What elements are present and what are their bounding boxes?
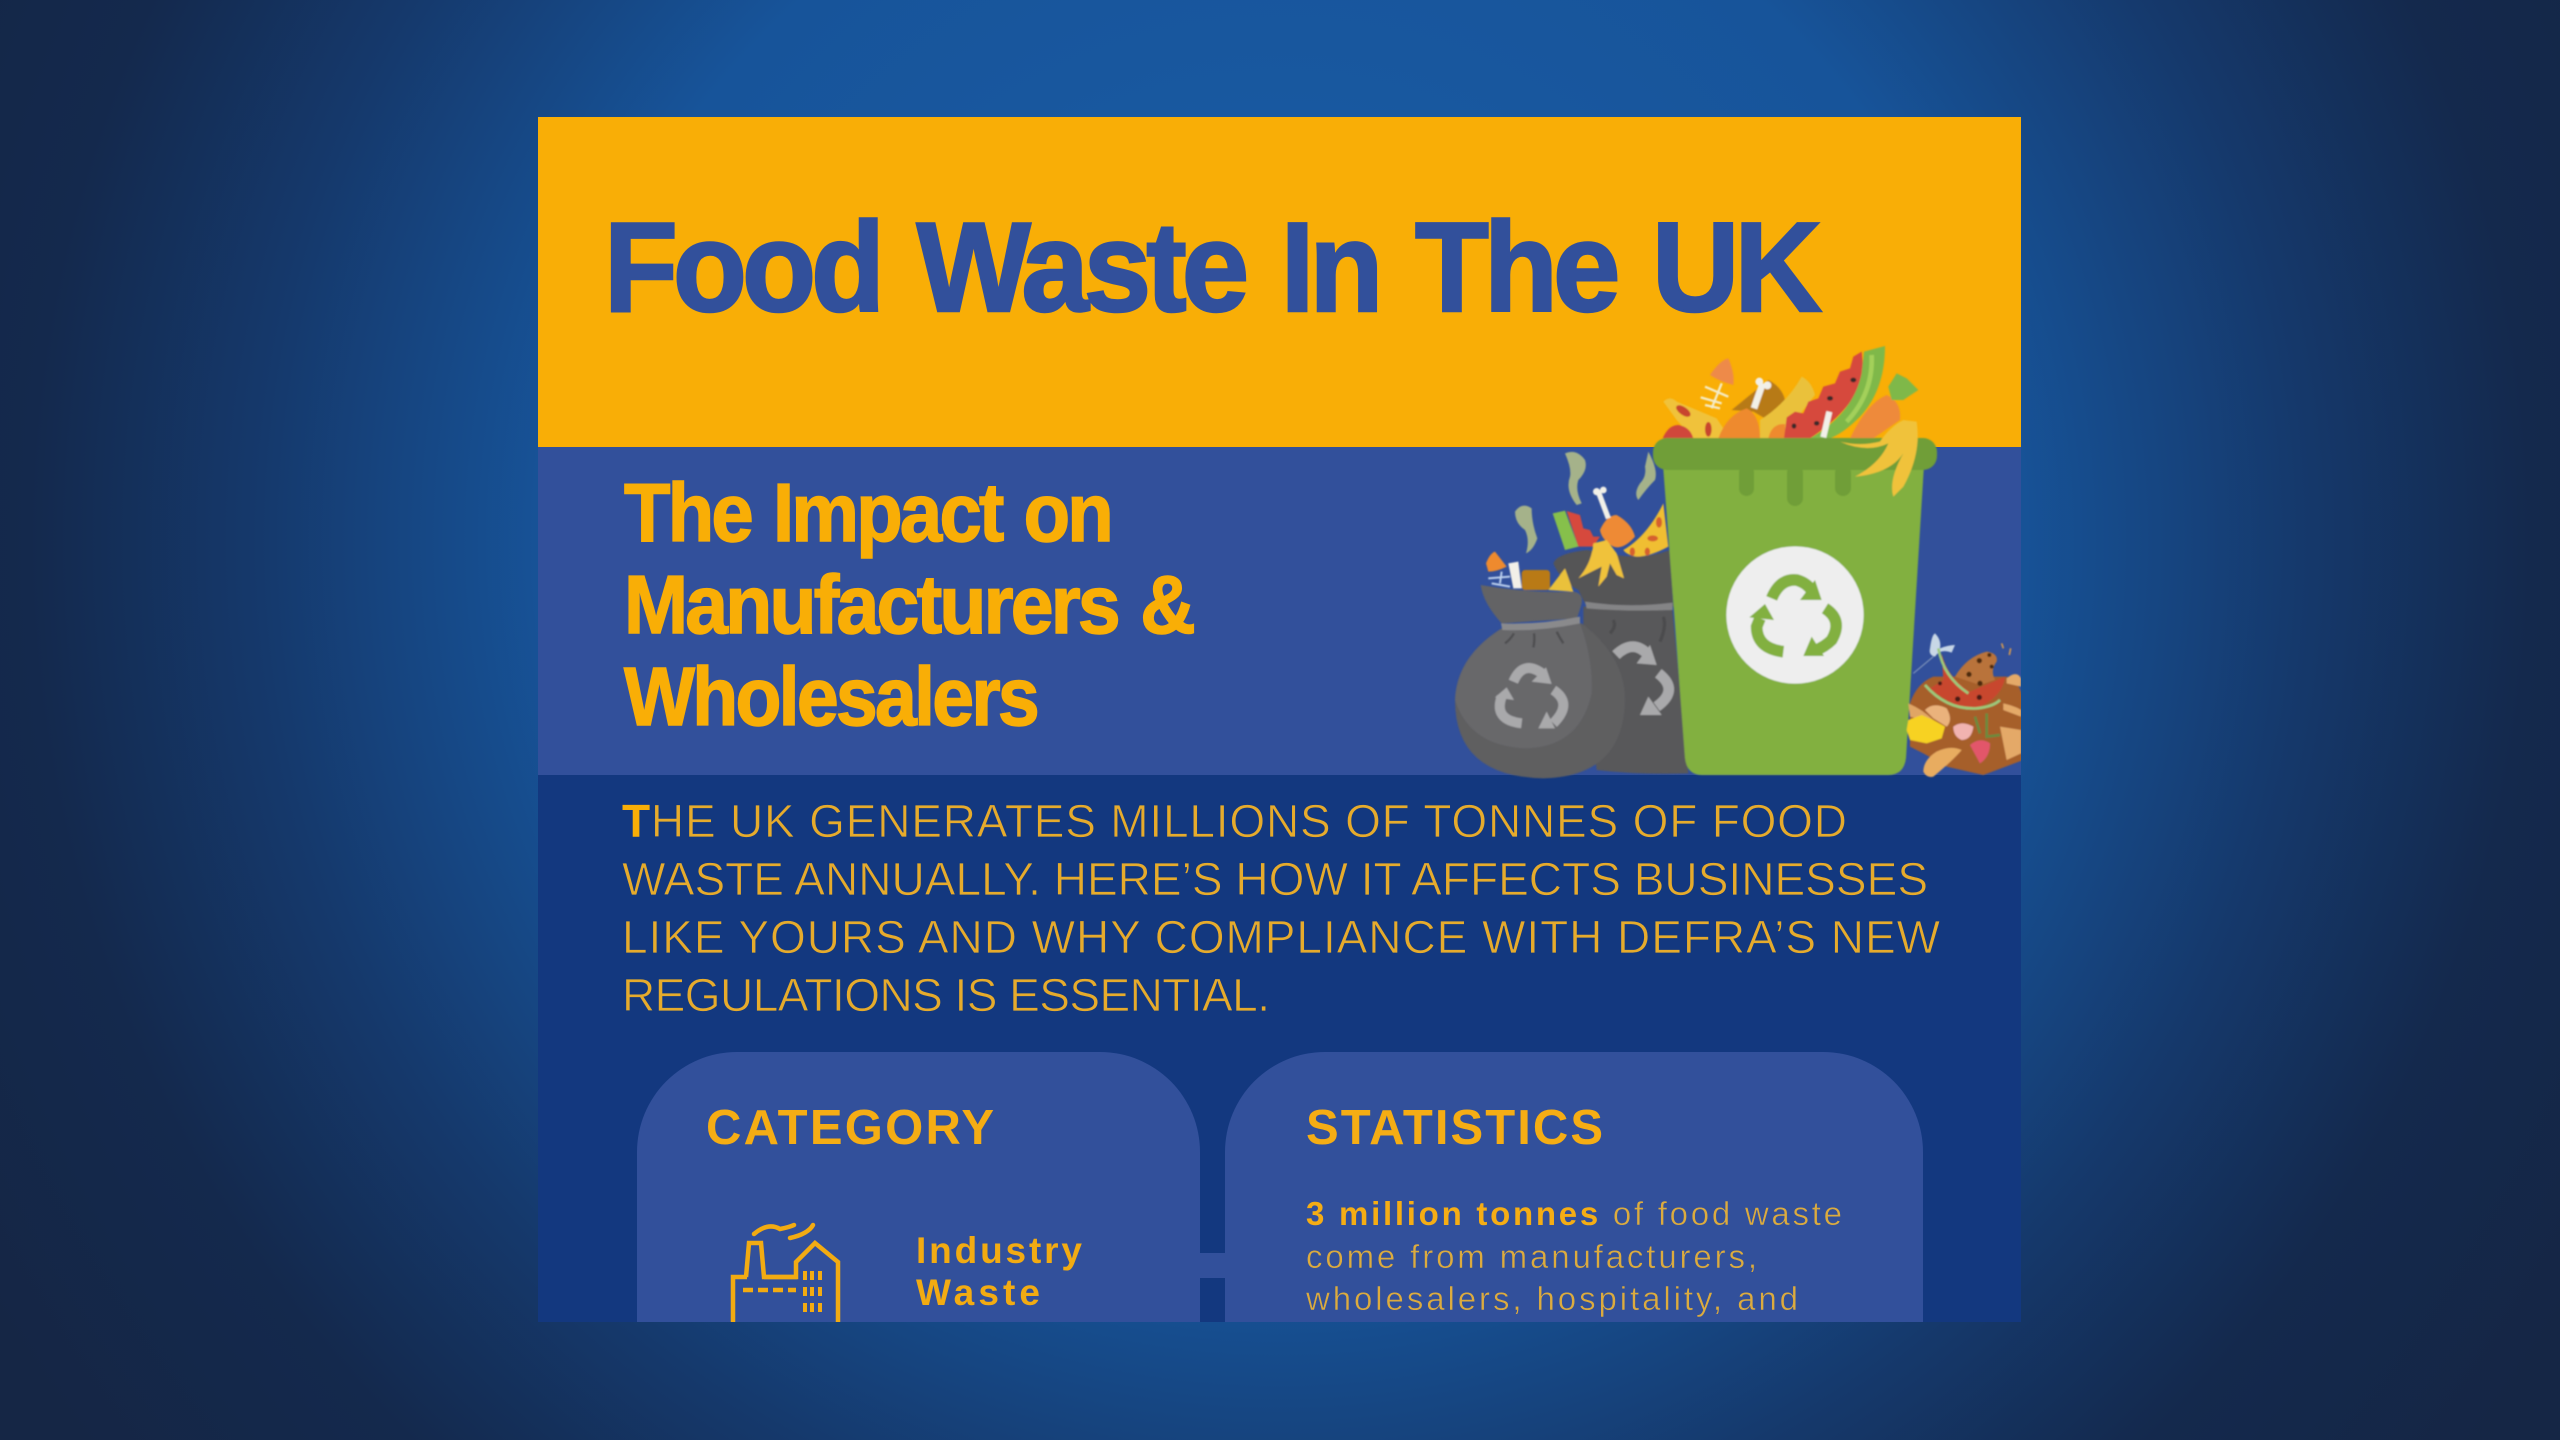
category label: industry waste bbox=[916, 1236, 1082, 1306]
panel: statistics card bbox=[1225, 1052, 1923, 1322]
illustration: waste bags, bin and food bbox=[1455, 346, 2023, 778]
intro text block: WASTE ANNUALLY. HERE’S HOW IT AFFECTS BUSINESSES bbox=[622, 853, 1928, 905]
panel: subtitle band bbox=[538, 447, 2021, 775]
icon: banana peel bbox=[1840, 420, 1918, 497]
category label: industry waste: Waste bbox=[916, 1272, 1040, 1313]
statistics text: come from manufacturers, bbox=[1306, 1238, 1757, 1275]
infographic bbox=[538, 117, 2021, 1322]
icon: back bag bbox=[1583, 603, 1688, 774]
statistics text bbox=[1305, 1195, 1842, 1317]
title: Food Waste In The UK bbox=[604, 196, 1821, 338]
icon: scrap food pile bbox=[1907, 633, 2023, 777]
intro text block: REGULATIONS IS ESSENTIAL. bbox=[622, 969, 1270, 1021]
intro text block: THE UK GENERATES MILLIONS OF TONNES OF FOOD bbox=[622, 795, 1847, 847]
subtitle heading: Wholesalers bbox=[624, 650, 1037, 743]
connector between cards bbox=[1200, 1253, 1225, 1278]
icon: front bag bbox=[1454, 584, 1597, 779]
icon: bin food pile bbox=[1663, 346, 1918, 438]
intro text block: LIKE YOURS AND WHY COMPLIANCE WITH DEFRA’S NEW bbox=[622, 911, 1941, 963]
panel: yellow title band bbox=[538, 117, 2021, 447]
subtitle heading bbox=[623, 480, 1194, 727]
intro text block bbox=[622, 795, 1941, 1021]
subtitle heading: Manufacturers & bbox=[624, 558, 1194, 651]
statistics text: 3 million tonnes of food waste bbox=[1306, 1195, 1842, 1232]
icon: food on back bag bbox=[1486, 452, 1673, 611]
icon: green recycling bin bbox=[1653, 438, 1937, 775]
statistics text: wholesalers, hospitality, and bbox=[1305, 1280, 1798, 1317]
subtitle heading: The Impact on bbox=[624, 466, 1111, 559]
statistics heading: STATISTICS bbox=[1306, 1101, 1603, 1155]
panel: category card bbox=[637, 1052, 1200, 1322]
icon: factory bbox=[733, 1225, 838, 1340]
panel: dark blue base bbox=[538, 775, 2021, 1322]
icon: recycle badge bbox=[1726, 546, 1864, 684]
category label: industry waste: Industry bbox=[916, 1230, 1082, 1271]
category heading: CATEGORY bbox=[706, 1101, 994, 1155]
